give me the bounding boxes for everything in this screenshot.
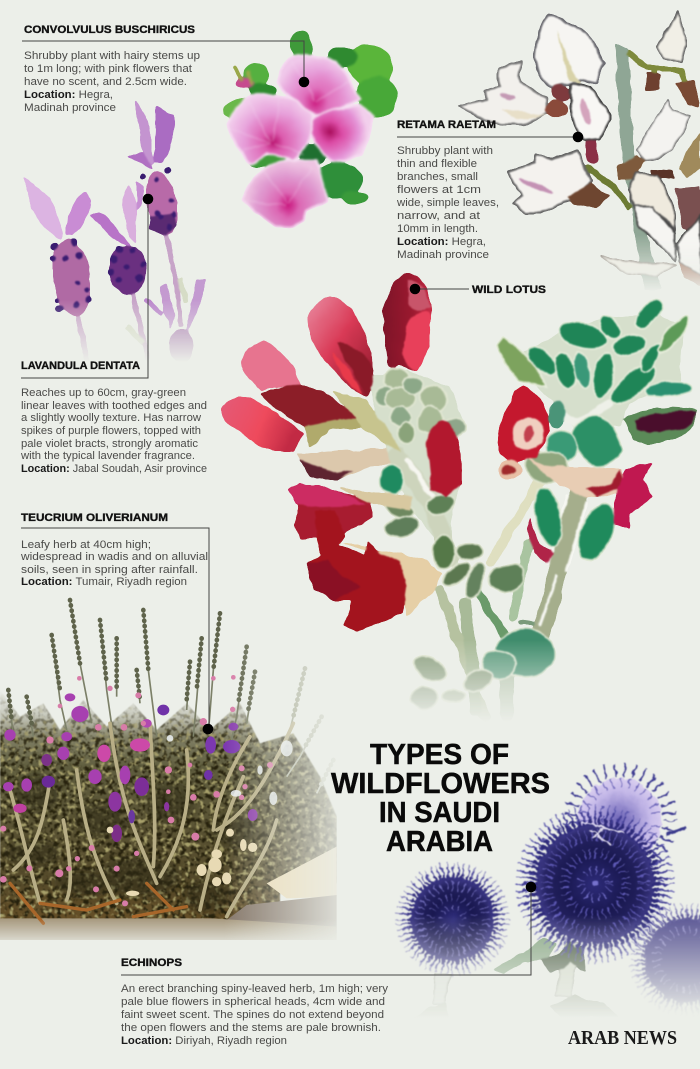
title: WILDFLOWERS (331, 768, 550, 800)
description: pale blue flowers in spherical heads, 4cm wide and (121, 996, 385, 1008)
description: linear leaves with toothed edges and (21, 400, 207, 412)
marker dot (526, 882, 536, 892)
description: branches, small (397, 171, 478, 183)
bush flower spikes (8, 600, 333, 787)
description: flowers at 1cm (397, 184, 481, 196)
bush body (0, 690, 337, 930)
description: soils, seen in spring after rainfall. (21, 564, 198, 576)
bush dark foliage (7, 775, 257, 913)
description: 10mm in length. (397, 223, 478, 235)
bush pink buds (0, 675, 273, 906)
description: pale violet bracts, strongly aromatic (21, 438, 198, 450)
description: to 1m long; with pink flowers that (24, 63, 192, 75)
description: An erect branching spiny-leaved herb, 1m high; very (121, 983, 389, 995)
illustration: wild lotus plant (220, 273, 697, 717)
bush ground (267, 847, 337, 898)
description: thin and flexible (397, 158, 477, 170)
lotus stems (397, 403, 610, 717)
description: a slightly woolly texture. Has narrow (21, 412, 201, 424)
echinops central large ball (519, 808, 671, 960)
title: IN SAUDI (379, 797, 500, 829)
marker dot (410, 284, 420, 294)
description: Location: Diriyah, Riyadh region (121, 1035, 287, 1047)
description: the open flowers and the stems are pale brownish. (121, 1022, 381, 1034)
echinops stems and leaves (430, 938, 610, 1010)
description (20, 539, 208, 588)
description: have no scent, and 2.5cm wide. (24, 76, 187, 88)
description (121, 983, 389, 1047)
leader line (21, 199, 148, 378)
description: Location: Hegra, (24, 89, 113, 101)
logo: Arab News: ARAB NEWS (568, 1027, 677, 1049)
leader line (397, 136, 578, 138)
callout: Convolvulus buschiricus (22, 24, 309, 114)
description: spikes of purple flowers, topped with (21, 425, 201, 437)
lotus red petals (383, 273, 432, 372)
leader line (415, 288, 469, 290)
description (20, 387, 207, 475)
illustration: retama raetam flowers (458, 12, 700, 290)
description: Leafy herb at 40cm high; (21, 539, 151, 551)
marker dot (573, 132, 583, 142)
title: ARABIA (386, 826, 493, 858)
description: Madinah province (397, 249, 489, 261)
title (331, 739, 550, 858)
description: narrow, and at (397, 210, 480, 222)
bush sky gaps (167, 735, 293, 805)
leader line (22, 41, 304, 82)
lotus pale backing (367, 313, 683, 570)
marker dot (203, 724, 213, 734)
description (396, 145, 499, 261)
echinops top light ball (570, 770, 686, 870)
description: Location: Jabal Soudah, Asir province (21, 463, 207, 475)
bush cream stones (107, 827, 257, 896)
bush spike stems (8, 600, 333, 793)
description (24, 50, 200, 114)
leader line (121, 887, 531, 975)
callout: Lavandula dentata (20, 194, 207, 475)
heading: CONVOLVULUS BUSCHIRICUS (24, 24, 195, 36)
callout: Retama raetam (396, 119, 583, 261)
illustration: echinops globe flowers (399, 770, 700, 1027)
description: Madinah province (24, 102, 116, 114)
illustration: lavandula dentata flowers (23, 100, 207, 363)
description: Shrubby plant with hairy stems up (24, 50, 200, 62)
heading: WILD LOTUS (472, 284, 546, 296)
description: wide, simple leaves, (396, 197, 499, 209)
echinops left ball (399, 865, 507, 973)
description: Location: Tumair, Riyadh region (21, 576, 187, 588)
heading: ECHINOPS (121, 957, 182, 969)
description: faint sweet scent. The spines do not extend beyond (121, 1009, 384, 1021)
lotus big round leaves (380, 415, 623, 679)
leader line (21, 528, 209, 729)
callout: Wild lotus (410, 284, 546, 296)
illustration: teucrium oliverianum bush (0, 600, 337, 940)
lotus pale calyxes and pods (333, 392, 402, 453)
description: Location: Hegra, (397, 236, 486, 248)
illustration: convolvulus flowers (220, 31, 399, 227)
title: TYPES OF (370, 739, 509, 771)
heading: LAVANDULA DENTATA (21, 360, 140, 372)
marker dot (299, 77, 309, 87)
lotus upper right green leaves (497, 294, 693, 428)
bush purple flowers (3, 693, 258, 842)
description: Reaches up to 60cm, gray-green (21, 387, 186, 399)
heading: TEUCRIUM OLIVERIANUM (21, 512, 168, 524)
bush stems (10, 723, 293, 923)
heading: RETAMA RAETAM (397, 119, 496, 131)
description: widespread in wadis and on alluvial (20, 551, 208, 563)
description: with the typical lavender fragrance. (20, 450, 195, 462)
lotus grey green leaves (374, 369, 568, 710)
echinops right faded ball (633, 906, 700, 1014)
callout: Echinops (121, 882, 536, 1047)
callout: Teucrium oliverianum (20, 512, 213, 734)
description: Shrubby plant with (397, 145, 493, 157)
marker dot (143, 194, 153, 204)
